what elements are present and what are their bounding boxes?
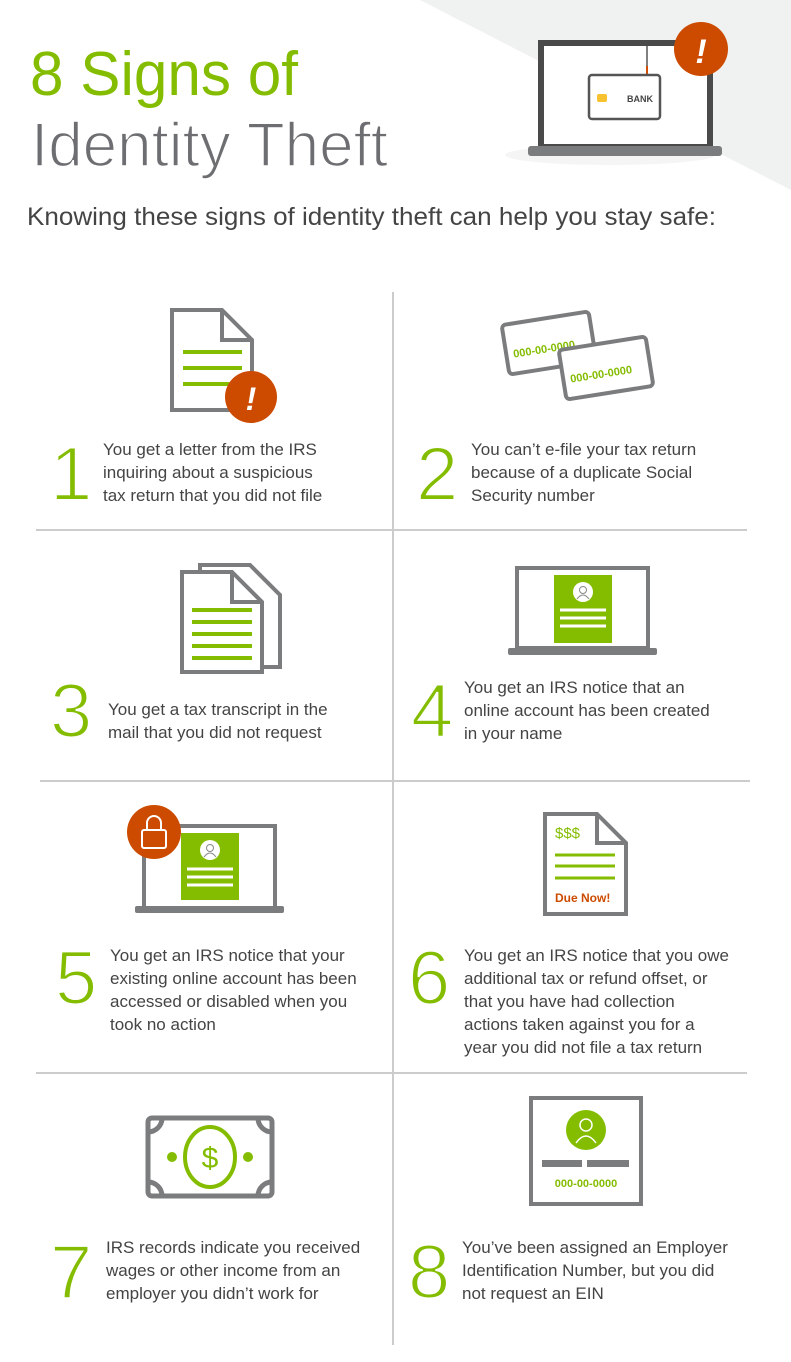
sign 4 bbox=[411, 669, 710, 754]
sign 5: 5 bbox=[55, 936, 97, 1021]
sign 5: accessed or disabled when you bbox=[110, 992, 347, 1011]
sign 6: 6 bbox=[408, 936, 450, 1021]
icon: due now bill: Due Now! bbox=[555, 891, 610, 905]
sign 4: 4 bbox=[411, 669, 453, 754]
sign 8: You’ve been assigned an Employer bbox=[462, 1238, 728, 1257]
sign 6: additional tax or refund offset, or bbox=[464, 969, 708, 988]
sign 4: You get an IRS notice that an bbox=[464, 678, 685, 697]
icon: laptop with phishing bank card bbox=[505, 22, 728, 165]
sign 7 bbox=[50, 1230, 360, 1315]
sign 7: employer you didn’t work for bbox=[106, 1284, 319, 1303]
icon: social security cards: 000-00-0000 bbox=[569, 364, 633, 386]
sign 8: 8 bbox=[408, 1230, 450, 1315]
sign 5: took no action bbox=[110, 1015, 216, 1034]
icon: tax transcript pages bbox=[182, 565, 280, 672]
subtitle: Knowing these signs of identity theft can help you stay safe: bbox=[27, 203, 716, 231]
sign 8 bbox=[408, 1230, 728, 1315]
icon: due now bill: $$$ bbox=[555, 825, 581, 842]
icon: EIN card bbox=[531, 1098, 641, 1204]
icon: laptop with phishing bank card: ! bbox=[695, 33, 707, 71]
sign 2: 2 bbox=[416, 432, 458, 517]
sign 2: because of a duplicate Social bbox=[471, 463, 692, 482]
sign 7: 7 bbox=[50, 1230, 92, 1315]
sign 6 bbox=[408, 936, 729, 1057]
sign 4: in your name bbox=[464, 724, 562, 743]
sign 1: tax return that you did not file bbox=[103, 486, 322, 505]
sign 2 bbox=[416, 432, 696, 517]
icon: locked laptop account bbox=[127, 805, 284, 913]
sign 5: You get an IRS notice that your bbox=[110, 946, 345, 965]
sign 8: Identification Number, but you did bbox=[462, 1261, 714, 1280]
icon: EIN card: 000-00-0000 bbox=[555, 1178, 617, 1190]
icon: social security cards bbox=[502, 311, 653, 400]
sign 6: actions taken against you for a bbox=[464, 1015, 695, 1034]
title bbox=[30, 40, 388, 180]
sign 7: wages or other income from an bbox=[105, 1261, 340, 1280]
sign 7: IRS records indicate you received bbox=[106, 1238, 360, 1257]
sign 3: mail that you did not request bbox=[108, 723, 322, 742]
sign 1: inquiring about a suspicious bbox=[103, 463, 313, 482]
sign 1: 1 bbox=[50, 432, 92, 517]
icon: laptop with phishing bank card: BANK bbox=[627, 94, 653, 104]
sign 3: You get a tax transcript in the bbox=[108, 700, 328, 719]
sign 3 bbox=[50, 669, 328, 754]
icon: letter with alert bbox=[172, 310, 277, 423]
sign 6: year you did not file a tax return bbox=[464, 1038, 702, 1057]
sign 6: You get an IRS notice that you owe bbox=[464, 946, 729, 965]
sign 1 bbox=[50, 432, 322, 517]
icon: laptop with account bbox=[508, 568, 657, 655]
sign 6: that you have had collection bbox=[464, 992, 675, 1011]
icon: dollar bill bbox=[148, 1118, 272, 1196]
icon: due now bill bbox=[545, 814, 626, 914]
icon: social security cards: 000-00-0000 bbox=[512, 339, 576, 361]
sign 2: You can’t e-file your tax return bbox=[471, 440, 696, 459]
icon: dollar bill: $ bbox=[202, 1142, 219, 1175]
icon: letter with alert: ! bbox=[246, 381, 257, 417]
sign 8: not request an EIN bbox=[462, 1284, 604, 1303]
sign 4: online account has been created bbox=[464, 701, 710, 720]
title: Identity Theft bbox=[31, 111, 388, 180]
sign 1: You get a letter from the IRS bbox=[103, 440, 317, 459]
sign 2: Security number bbox=[471, 486, 595, 505]
title: 8 Signs of bbox=[30, 40, 299, 109]
sign 5: existing online account has been bbox=[110, 969, 357, 988]
sign 5 bbox=[55, 936, 357, 1034]
sign 3: 3 bbox=[50, 669, 92, 754]
